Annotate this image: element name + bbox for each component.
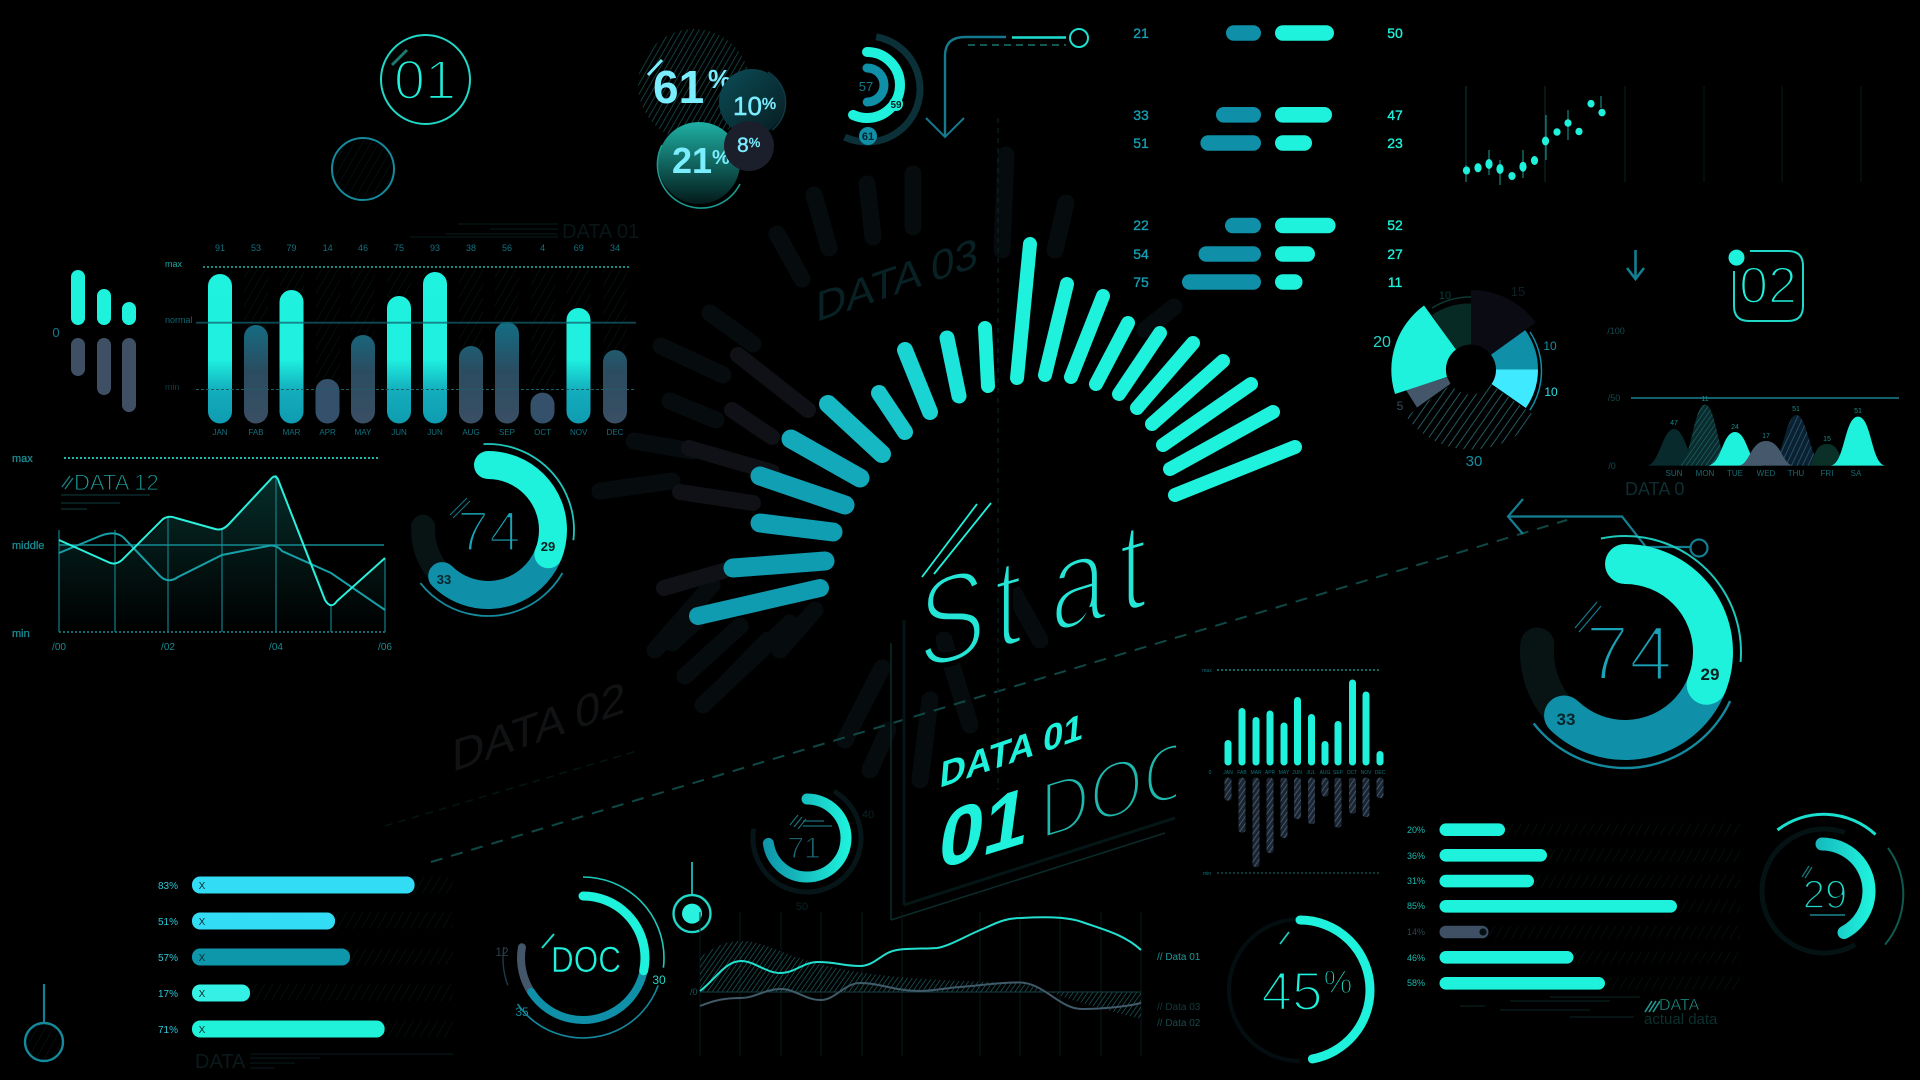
gauge 45% [1229, 919, 1371, 1061]
bubble 10% [719, 69, 786, 135]
wave chart [690, 912, 1201, 1056]
weekly bell area chart: 15 [1823, 436, 1831, 443]
lower centre bar chart: NOV [1361, 770, 1372, 776]
caption: DATA actual data [1460, 997, 1718, 1028]
row 46%: 46% [1407, 953, 1425, 963]
chart axis labels: FRI [1821, 469, 1833, 478]
weekly bell area chart: 17 [1762, 433, 1770, 440]
pie labels: 10 [1439, 290, 1451, 302]
row 75 / 11: 11 [1388, 274, 1402, 290]
heading: DATA 01: DATA 01 [938, 705, 1085, 796]
legend: // Data 02 [1157, 1018, 1201, 1029]
row 36% [1407, 849, 1547, 862]
lower centre bar chart: APR [1265, 770, 1276, 776]
empty hatched circle [332, 138, 394, 200]
donut 71 [733, 764, 881, 913]
row 51%: 51% [158, 917, 178, 928]
donut DOC: 12 [495, 945, 509, 959]
gauge 45%: % [1324, 964, 1352, 1000]
slice 10 teal [1491, 330, 1538, 370]
axis side labels [165, 259, 193, 392]
hatched area [700, 941, 1141, 1019]
donut 71: 50 [796, 901, 808, 913]
row 51 / 23 [1133, 135, 1403, 151]
row 31%: 31% [1407, 876, 1425, 886]
weekly bell area chart [1607, 326, 1899, 478]
value labels: 79 [286, 243, 297, 253]
bubble 21% [657, 122, 740, 208]
small split bars left [52, 270, 136, 412]
pie labels: 15 [1511, 284, 1525, 299]
row 54 / 27 [1133, 246, 1403, 262]
chart title [61, 470, 159, 509]
legend: // Data 01 [1157, 952, 1201, 963]
faded label: DATA bottom: DATA [195, 1051, 246, 1073]
pie labels: 10 [1544, 385, 1558, 399]
row 20%: 20% [1407, 825, 1425, 835]
bars [208, 272, 627, 424]
lower centre bar chart: AUG [1320, 770, 1331, 776]
donut 71: 71 [787, 832, 821, 865]
row 51% [158, 912, 335, 930]
month labels: MAY [355, 428, 372, 437]
diverging horizontal bars [1133, 25, 1403, 290]
month labels: JUN [427, 428, 443, 437]
row 54 / 27: 27 [1387, 246, 1403, 262]
row 85%: 85% [1407, 901, 1425, 911]
bubble 8%: % [749, 135, 761, 150]
caption: DATA actual data: DATA [1659, 997, 1700, 1014]
pie labels [1373, 284, 1558, 470]
x axis labels [52, 642, 392, 653]
arrow: small down [1627, 250, 1644, 279]
bubble 61% [638, 29, 750, 141]
row 36%: 36% [1407, 851, 1425, 861]
donut 29 [1739, 806, 1909, 976]
row 58% [1407, 977, 1605, 990]
value labels: 53 [251, 243, 261, 253]
pin marker left [25, 984, 63, 1061]
title: Stat: a [1050, 501, 1107, 661]
mid donut 74: 33 [437, 572, 451, 587]
slice 5 slate [1406, 377, 1450, 408]
line chart DATA 12 [12, 453, 392, 653]
big donut 74: 33 [1557, 710, 1575, 729]
value labels [215, 243, 620, 253]
row 31% [1407, 875, 1534, 887]
title: Stat: t [1119, 490, 1147, 642]
legend [1157, 952, 1201, 1029]
range labels: max [12, 453, 33, 465]
month labels: AUG [462, 428, 480, 437]
donut DOC: 30 [652, 973, 666, 987]
donut DOC: 35 [515, 1005, 529, 1019]
heading: DOC: DOC [1040, 722, 1193, 858]
badge: 02 rounded box: 02 [1739, 257, 1797, 315]
threshold lines [196, 267, 636, 390]
monthly bar chart [165, 221, 639, 437]
gauge 45%: 45 [1261, 960, 1323, 1022]
row 14%: 14% [1407, 927, 1425, 937]
lower centre bar chart: JUL [1307, 770, 1316, 776]
area fill [59, 475, 385, 632]
percentage bubbles cluster [638, 29, 786, 208]
title: Stat [918, 490, 1147, 699]
chart axis labels: /0 [1608, 461, 1616, 471]
title: Stat: t [994, 526, 1022, 677]
lower centre bar chart: MAY [1279, 770, 1290, 776]
bubble 61%: 61 [653, 61, 704, 113]
axis side labels: min [165, 382, 180, 392]
row 22 / 52 [1133, 217, 1403, 233]
heading: 01: 01 [934, 767, 1035, 888]
chart axis labels: /50 [1608, 393, 1620, 403]
lower centre bar chart: MAR [1250, 770, 1262, 776]
arrow: left pointing connector [1508, 499, 1708, 556]
small split bars left: 0 [52, 325, 60, 340]
title: Stat: S [918, 536, 986, 699]
month labels [212, 428, 624, 437]
x axis labels: /04 [269, 642, 283, 653]
faint background radial bars [600, 155, 1174, 780]
mid donut 74 [371, 413, 605, 647]
lower centre bar chart: JAN [1223, 770, 1233, 776]
row 51%: X [199, 917, 206, 928]
row 71% [158, 1020, 385, 1038]
row 71%: 71% [158, 1025, 178, 1036]
row 33 / 47: 47 [1387, 107, 1403, 123]
row 33 / 47: 33 [1133, 107, 1149, 123]
month labels: SEP [499, 428, 515, 437]
lower centre bar chart: JUN [1292, 770, 1302, 776]
row 22 / 52: 52 [1387, 217, 1403, 233]
mid donut 74: 29 [541, 539, 555, 554]
donut 29: 29 [1803, 873, 1847, 917]
row 21 / 50: 21 [1133, 25, 1149, 41]
row 51 / 23: 51 [1133, 135, 1149, 151]
badge: 01 circle: 01 [394, 48, 456, 111]
row 75 / 11 [1133, 274, 1402, 290]
chart title: DATA 12 [74, 470, 159, 495]
row 22 / 52: 22 [1133, 217, 1149, 233]
hatch columns [208, 267, 627, 392]
value labels: 91 [215, 243, 225, 253]
slice 20 bright [1391, 306, 1456, 394]
row 14% [1407, 926, 1488, 938]
chart axis labels: MON [1696, 469, 1715, 478]
value labels: 69 [574, 243, 584, 253]
pie labels: 20 [1373, 334, 1391, 351]
x axis labels: /00 [52, 642, 66, 653]
slice 10 dark [1432, 303, 1471, 350]
bubble 61%: % [708, 64, 731, 94]
month labels: NOV [570, 428, 588, 437]
legend: // Data 03 [1157, 1002, 1201, 1013]
bright bars on right [985, 244, 1295, 495]
row 71%: X [199, 1025, 206, 1036]
bubble 21%: 21 [672, 140, 712, 181]
chart axis labels: SA [1851, 469, 1862, 478]
x axis labels: /02 [161, 642, 175, 653]
badge: 01 circle [381, 35, 470, 124]
bubble 10%: 10 [733, 91, 762, 121]
chart axis labels: TUE [1727, 469, 1743, 478]
bubble 10%: % [762, 96, 776, 113]
pin marker center [674, 862, 710, 932]
horizontal percent bars bottom left [158, 876, 453, 1038]
month labels: MAR [283, 428, 301, 437]
chart axis labels: /100 [1607, 326, 1625, 336]
weekly bell area chart: 51 [1792, 406, 1800, 413]
lower centre bar chart: SEP [1333, 770, 1344, 776]
arrow: top connector with circle [926, 29, 1088, 137]
concentric donut 57 59 61: 57 [859, 79, 873, 94]
row 17%: X [199, 989, 206, 1000]
bars upper left [947, 338, 959, 396]
faded label: DATA 01 right: DATA 0 [1625, 479, 1684, 499]
range labels [12, 453, 44, 640]
wave chart: /0 [690, 987, 698, 997]
faint title: DATA 02: DATA 02 [452, 672, 625, 782]
concentric donut 57 59 61: 59 [890, 100, 902, 111]
row 83% [158, 876, 415, 894]
slice 30 hatched [1406, 384, 1536, 450]
x axis labels: /06 [378, 642, 392, 653]
slice 15 [1471, 290, 1536, 355]
row 21 / 50 [1133, 25, 1403, 41]
donut DOC: DOC [551, 939, 621, 980]
big donut 74: 29 [1701, 665, 1719, 684]
lower centre bar chart: FAB [1237, 770, 1247, 776]
row 85% [1407, 900, 1677, 913]
lower centre bar chart: 0 [1209, 770, 1212, 776]
weekly bell area chart: 51 [1854, 408, 1862, 415]
weekly bell area chart: 47 [1670, 420, 1678, 427]
badge: 02 rounded box [1728, 250, 1803, 321]
chart axis labels: THU [1788, 469, 1804, 478]
chart axis labels: WED [1757, 469, 1776, 478]
row 54 / 27: 54 [1133, 246, 1149, 262]
axis side labels: normal [165, 315, 193, 325]
row 21 / 50: 50 [1387, 25, 1403, 41]
horizontal percent bars right [1407, 823, 1740, 990]
slate line [700, 982, 1141, 1009]
value labels: 46 [358, 243, 368, 253]
bubble 8% [724, 121, 774, 171]
big donut 74 [1471, 498, 1779, 806]
row 57%: 57% [158, 953, 178, 964]
value labels: 56 [502, 243, 512, 253]
row 46% [1407, 951, 1574, 964]
weekly bell area chart: 24 [1731, 424, 1739, 431]
bubble 21%: % [712, 147, 730, 169]
row 57% [158, 948, 350, 966]
concentric donut 57 59 61: 61 [862, 131, 874, 143]
value labels: 38 [466, 243, 476, 253]
value labels: 34 [610, 243, 620, 253]
mid donut 74: 74 [457, 500, 521, 564]
row 83%: 83% [158, 881, 178, 892]
pie labels: 30 [1466, 453, 1482, 470]
lower centre bar chart: min [1203, 871, 1211, 877]
faded header lines and title: DATA 01 [562, 221, 639, 243]
pie labels: 5 [1397, 399, 1404, 413]
row 17% [158, 984, 250, 1002]
big donut 74: 74 [1586, 609, 1672, 697]
month labels: OCT [534, 428, 551, 437]
month labels: APR [319, 428, 336, 437]
lower centre bar chart: DEC [1375, 770, 1386, 776]
value labels: 93 [430, 243, 440, 253]
lower centre bar chart [1202, 668, 1386, 877]
chart axis labels: SUN [1666, 469, 1683, 478]
donut 71: 40 [862, 809, 874, 821]
faint title: DATA 03: DATA 03 [816, 229, 978, 332]
perspective frame lines and dashed diagonal [385, 118, 1567, 920]
month labels: JUN [391, 428, 407, 437]
lower centre bar chart: max [1202, 668, 1212, 674]
row 20% [1407, 823, 1505, 836]
row 17%: 17% [158, 989, 178, 1000]
bright line [700, 917, 1141, 991]
bubble 8%: 8 [737, 134, 749, 157]
row 57%: X [199, 953, 206, 964]
value labels: 75 [394, 243, 404, 253]
central radial burst of bars [698, 244, 1295, 616]
value labels: 14 [323, 243, 333, 253]
slice 10 cyan [1492, 370, 1538, 408]
value labels: 4 [540, 243, 545, 253]
scatter candlestick chart [1463, 86, 1861, 185]
row 58%: 58% [1407, 978, 1425, 988]
axis side labels: max [165, 259, 183, 269]
pie labels: 10 [1543, 339, 1557, 353]
month labels: JAN [212, 428, 228, 437]
row 75 / 11: 75 [1133, 274, 1149, 290]
concentric donut 57 59 61 [806, 28, 928, 150]
donut DOC [480, 855, 686, 1061]
pie chart [1373, 284, 1558, 470]
lower centre bar chart: OCT [1347, 770, 1357, 776]
month labels: DEC [607, 428, 624, 437]
row 33 / 47 [1133, 107, 1403, 123]
faint dark-slate radial bars [664, 355, 808, 588]
month labels: FAB [248, 428, 264, 437]
row 51 / 23: 23 [1387, 135, 1403, 151]
range labels: min [12, 628, 30, 640]
chart axis labels [1607, 326, 1862, 478]
weekly bell area chart: 11 [1701, 396, 1709, 403]
row 83%: X [199, 881, 206, 892]
caption: DATA actual data: actual data [1644, 1011, 1718, 1028]
range labels: middle [12, 540, 44, 552]
